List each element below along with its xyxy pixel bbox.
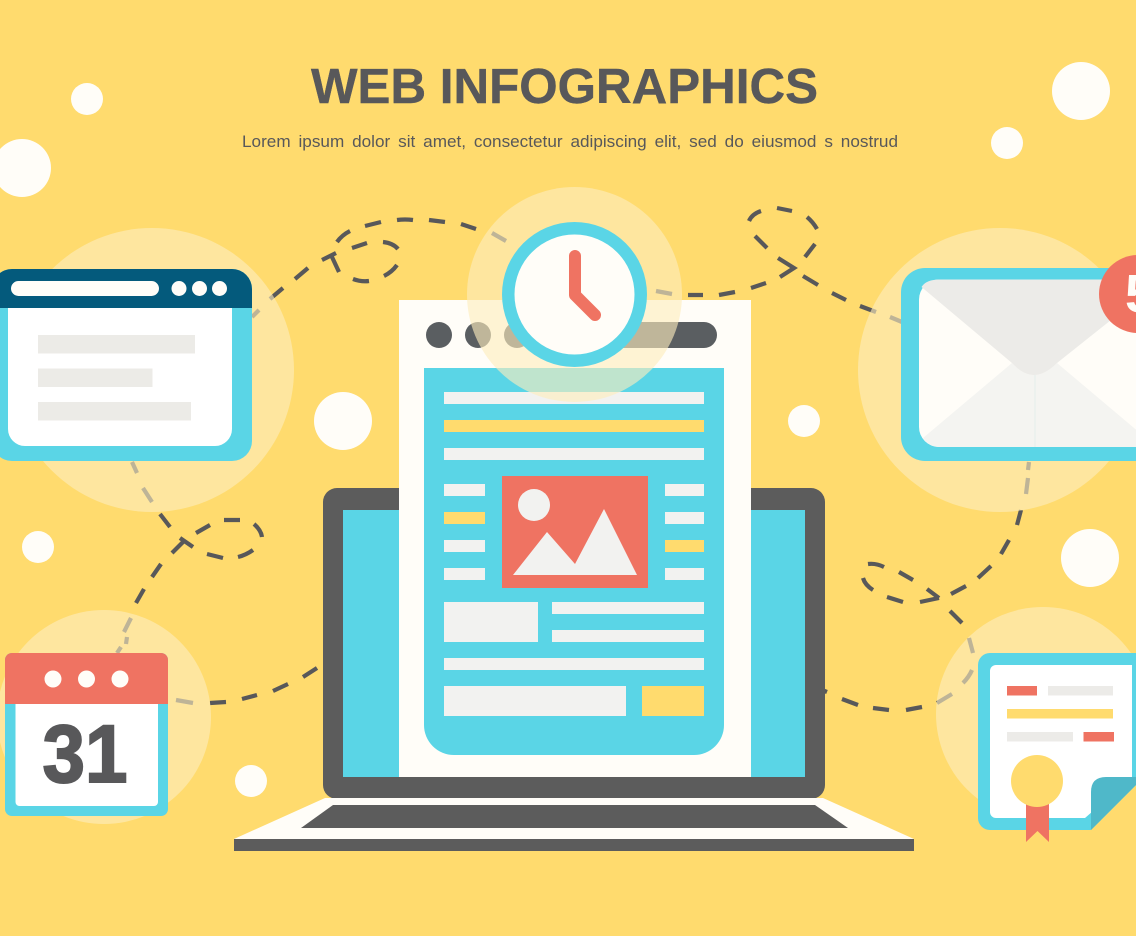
connector: browser to clock xyxy=(252,220,506,317)
calendar icon xyxy=(5,653,168,816)
calendar icon: 31 xyxy=(42,709,128,800)
clock halo xyxy=(467,187,682,402)
certificate icon xyxy=(978,653,1136,842)
connector: calendar to laptop xyxy=(176,668,317,703)
laptop xyxy=(234,488,914,851)
subtitle: Lorem ipsum dolor sit amet, consectetur adipiscing elit, sed do eiusmod s nostrud xyxy=(242,133,898,151)
web page document xyxy=(399,300,751,777)
halo circles xyxy=(0,228,1136,824)
envelope icon xyxy=(901,255,1136,461)
connector: envelope to certificate xyxy=(822,462,1029,710)
clock icon xyxy=(502,222,647,367)
connector: clock to envelope xyxy=(656,208,902,322)
image placeholder xyxy=(502,476,648,588)
decorative dots xyxy=(0,62,1119,797)
connector: browser to calendar xyxy=(117,462,262,653)
browser window icon xyxy=(0,269,252,461)
dashed connectors xyxy=(117,208,1029,710)
title: WEB INFOGRAPHICS xyxy=(311,60,818,114)
